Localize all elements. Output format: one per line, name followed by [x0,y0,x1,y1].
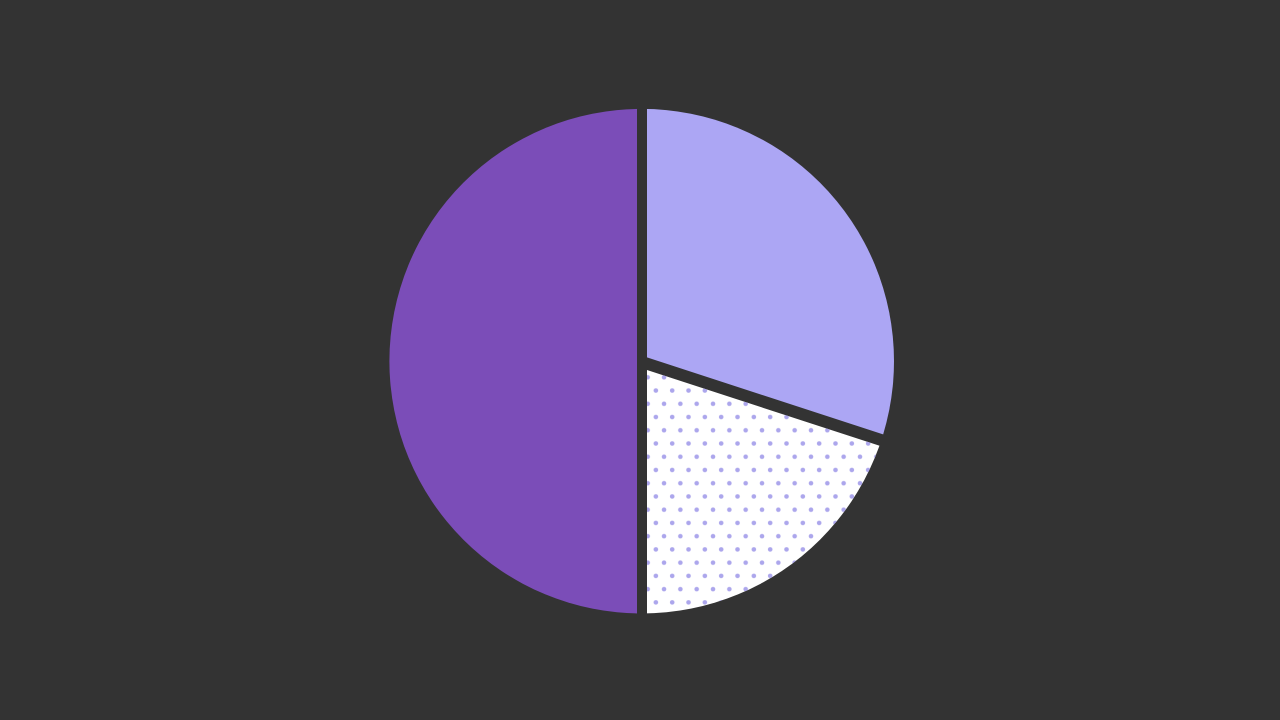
pie chart [389,109,894,614]
slice: dotted lower right [647,370,880,614]
slice: purple half [380,100,637,625]
slice: lavender upper right [647,100,905,442]
